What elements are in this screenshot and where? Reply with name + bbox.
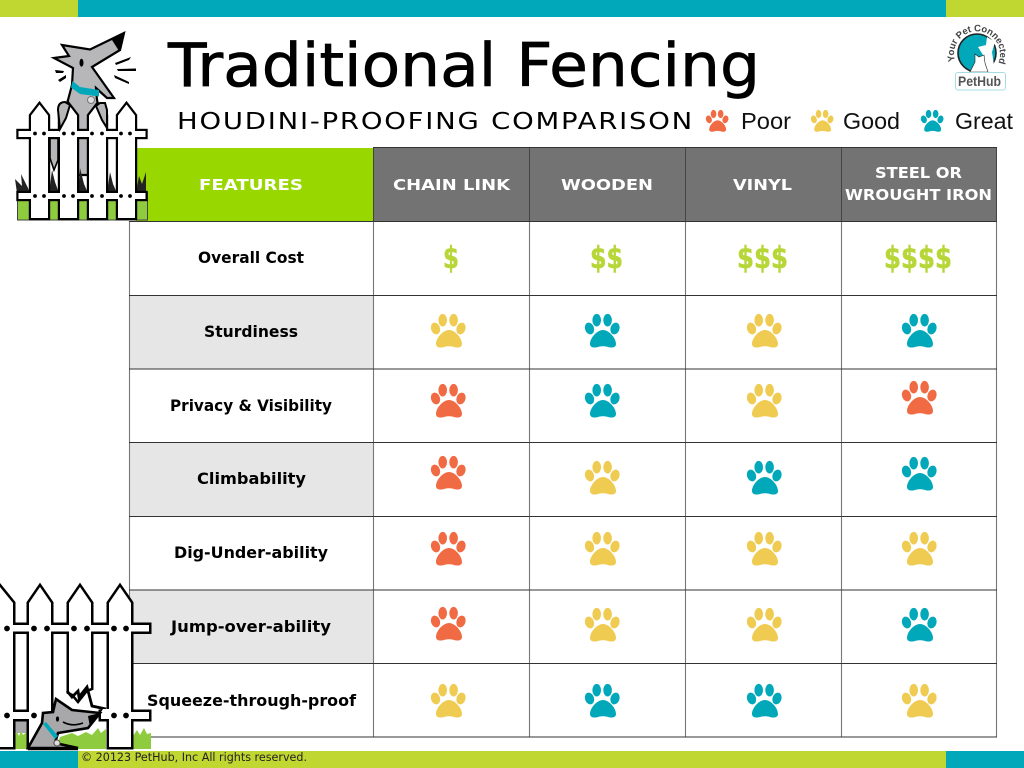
top colour bar xyxy=(0,0,1024,17)
ratings: privacy and visibility xyxy=(429,381,938,418)
row label: dig-under-ability: Dig-Under-ability xyxy=(174,543,329,562)
cost row: $$ xyxy=(590,241,623,276)
table header: wooden: WOODEN xyxy=(561,176,653,194)
grass base xyxy=(18,193,148,220)
legend: good: Good xyxy=(843,108,900,134)
legend: great xyxy=(920,108,1014,134)
subtitle: HOUDINI-PROOFING COMPARISON xyxy=(177,109,694,135)
dog and fence: top xyxy=(15,33,148,220)
legend xyxy=(705,108,1014,134)
row label: overall cost: Overall Cost xyxy=(198,248,304,267)
title: Traditional Fencing xyxy=(167,31,760,101)
picket fence xyxy=(0,587,149,747)
cost row: $ xyxy=(443,241,459,276)
ratings: jump-over-ability xyxy=(429,607,938,642)
row label: climbability: Climbability xyxy=(197,469,307,488)
gap fill and side grass xyxy=(14,721,151,749)
table header: chain link xyxy=(373,148,529,221)
legend: poor: Poor xyxy=(741,108,791,134)
ratings: climbability xyxy=(429,456,938,495)
dog howling xyxy=(54,33,136,175)
row label: privacy and visibility: Privacy & Visibility xyxy=(170,396,333,415)
table header: features: FEATURES xyxy=(199,176,303,194)
table header: vinyl: VINYL xyxy=(733,176,792,194)
dog peeking under fence xyxy=(28,699,100,749)
logo: PetHub xyxy=(947,24,1006,90)
cost row: $$$ xyxy=(737,241,788,276)
ratings: squeeze-through-proof xyxy=(429,684,938,718)
row label: jump-over-ability: Jump-over-ability xyxy=(170,617,332,636)
copyright: © 20123 PetHub, Inc All rights reserved. xyxy=(81,750,307,764)
table header: chain link: CHAIN LINK xyxy=(393,176,511,194)
logo: PetHub: PetHub xyxy=(958,73,1001,89)
front grass xyxy=(56,728,106,749)
legend: poor xyxy=(705,108,791,134)
bottom colour bar xyxy=(0,751,1024,768)
table header: steel or wrought iron: WROUGHT IRON xyxy=(845,186,992,204)
dog front legs xyxy=(58,102,107,129)
legend: great: Great xyxy=(955,108,1014,134)
grass xyxy=(15,168,146,193)
dog tail in fence gap xyxy=(50,137,58,170)
cost row: $$$$ xyxy=(884,241,952,276)
row label: squeeze-through-proof: Squeeze-through-proof xyxy=(147,691,357,710)
table header: features xyxy=(136,148,373,221)
legend: good xyxy=(810,108,900,134)
cost row xyxy=(443,241,952,276)
ratings: dig-under-ability xyxy=(429,532,938,566)
table header: steel or wrought iron xyxy=(841,148,997,221)
ratings: sturdiness xyxy=(429,314,938,348)
table header: steel or wrought iron: STEEL OR xyxy=(875,164,962,182)
logo: PetHub: Your Pet Connected xyxy=(947,24,1006,64)
picket fence xyxy=(18,104,146,218)
table header: vinyl xyxy=(685,148,841,221)
dog and fence: bottom xyxy=(0,587,151,749)
comparison table xyxy=(129,148,997,737)
row label: sturdiness: Sturdiness xyxy=(204,322,298,341)
table header: wooden xyxy=(529,148,685,221)
